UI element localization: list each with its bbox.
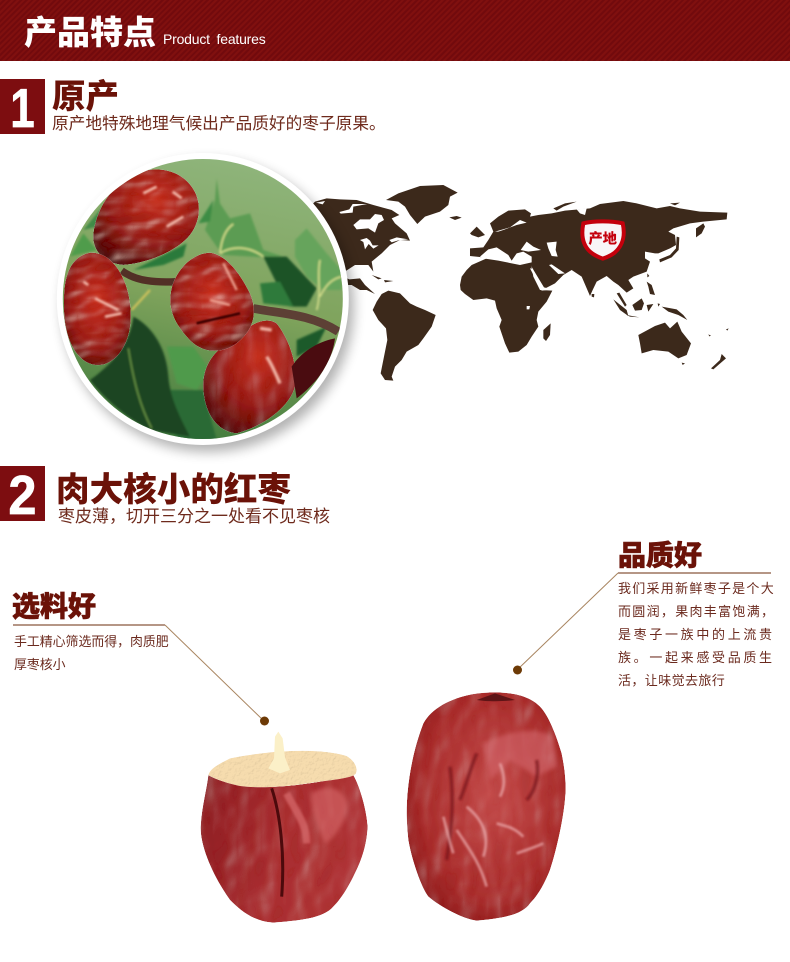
circular photo of red dates on branch	[55, 153, 361, 459]
callout description	[14, 631, 169, 673]
callout description: 而圆润，果肉丰富饱满，	[618, 601, 775, 620]
leaf veins	[220, 224, 342, 310]
date: bottom	[203, 321, 296, 433]
callout: quality	[618, 534, 775, 689]
dark leaf	[90, 317, 190, 437]
header banner	[0, 0, 790, 61]
header title: 产品特点	[24, 6, 156, 54]
callout description	[618, 578, 775, 689]
section 2 heading: 肉大核小的红枣	[56, 462, 291, 511]
date: left	[64, 253, 131, 365]
callout: material selection	[12, 585, 169, 673]
date: top	[93, 169, 199, 265]
callout description: 手工精心筛选而得，肉质肥	[14, 631, 169, 650]
date: right	[292, 338, 335, 398]
origin shield marker	[582, 221, 624, 259]
callout description: 厚枣核小	[14, 654, 66, 673]
callout description: 我们采用新鲜枣子是个大	[618, 578, 775, 597]
section 2 description: 枣皮薄，切开三分之一处看不见枣核	[58, 502, 330, 527]
origin shield marker: 产地	[588, 228, 618, 249]
leaves	[205, 178, 283, 257]
number badge 1	[0, 79, 45, 134]
callout description: 是枣子一族中的上流贵	[618, 624, 775, 643]
number badge 2	[0, 466, 45, 521]
section 1 heading: 原产	[52, 69, 119, 118]
callout description: 活，让味觉去旅行	[618, 670, 725, 689]
callout heading: 选料好	[12, 585, 96, 625]
branch	[122, 271, 177, 282]
circle shadow	[62, 160, 354, 452]
callout description: 族。一起来感受品质生	[618, 647, 775, 666]
header subtitle: Product features	[163, 31, 266, 47]
section 1 description: 原产地特殊地理气候出产品质好的枣子原果。	[52, 110, 386, 134]
callout heading: 品质好	[618, 534, 702, 574]
circle white frame	[57, 153, 349, 445]
date: middle	[170, 253, 254, 351]
